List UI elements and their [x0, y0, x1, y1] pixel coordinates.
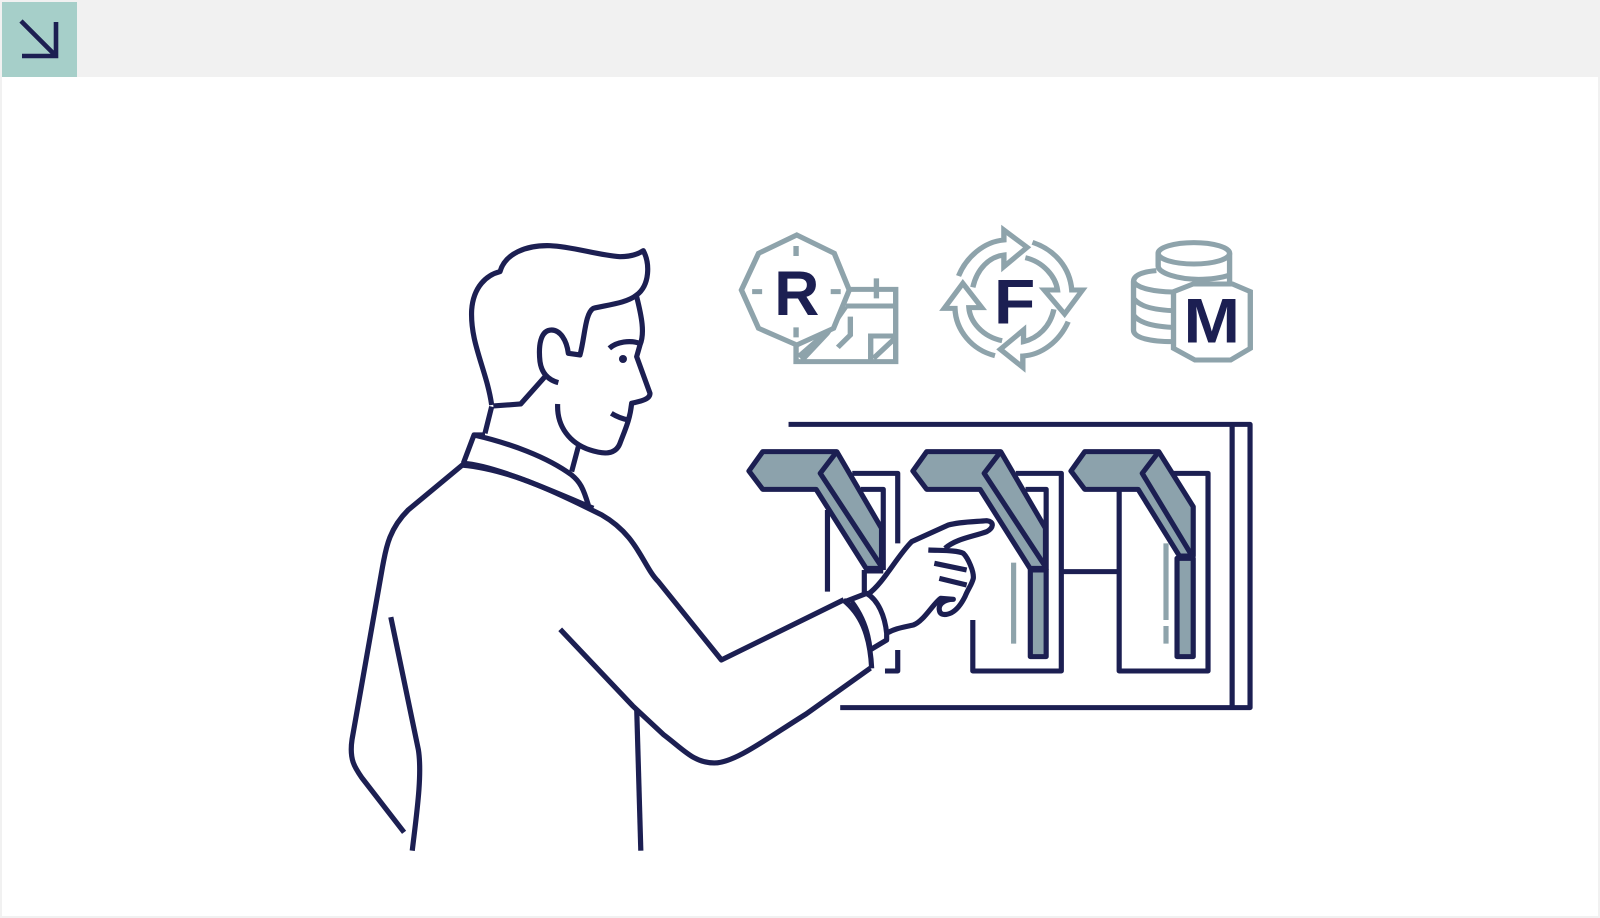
- hair and ear: [472, 246, 648, 405]
- back fold line: [391, 617, 420, 851]
- lever F ridge: [984, 452, 1045, 567]
- lever M guide bars: [1159, 543, 1174, 644]
- lever M stem: [1177, 558, 1193, 657]
- eyebrow: [609, 342, 640, 348]
- lever F slot: [973, 473, 1119, 671]
- lever F handle: [913, 452, 1045, 568]
- lever M handle: [1071, 452, 1193, 556]
- person: head: [463, 246, 650, 508]
- face profile: [558, 297, 650, 453]
- back and shoulder outline: [351, 465, 844, 832]
- hand outline: [843, 521, 992, 650]
- lever R ridge: [820, 452, 882, 567]
- sleeve edge: [843, 600, 872, 668]
- jacket centre line: [637, 710, 641, 851]
- icon: F frequency circular arrows: [944, 230, 1082, 367]
- lever R slot: [827, 473, 898, 671]
- icon: F frequency circular arrows: F: [994, 266, 1035, 337]
- mouth: [611, 413, 628, 420]
- collar: [463, 435, 593, 508]
- arm white fill: [571, 515, 870, 763]
- icon: M monetary coins: M: [1183, 285, 1240, 356]
- lever F guide bar: [1011, 563, 1016, 644]
- eye: [619, 355, 627, 363]
- curled fingers: [887, 550, 973, 633]
- outer board frame: [789, 424, 1250, 708]
- neck front: [572, 447, 578, 472]
- icon: R recency octagon with calendar: R: [774, 259, 819, 329]
- shirt cuff: [845, 593, 887, 650]
- index finger and back of hand: [868, 521, 992, 594]
- lever M slot: [1119, 473, 1208, 671]
- arm underside: [560, 629, 870, 763]
- icon: R recency octagon with calendar: [741, 235, 896, 362]
- lever F stem: [1030, 570, 1046, 657]
- panel: lever board: [749, 424, 1250, 708]
- person: torso and arm: [351, 465, 870, 851]
- lever R handle: [749, 452, 882, 568]
- person: hand and cuff: [843, 521, 992, 668]
- corner badge with arrow icon: [2, 2, 77, 77]
- icon: M monetary coins: [1134, 243, 1250, 360]
- lever M ridge: [1142, 452, 1191, 555]
- nape: [485, 377, 545, 433]
